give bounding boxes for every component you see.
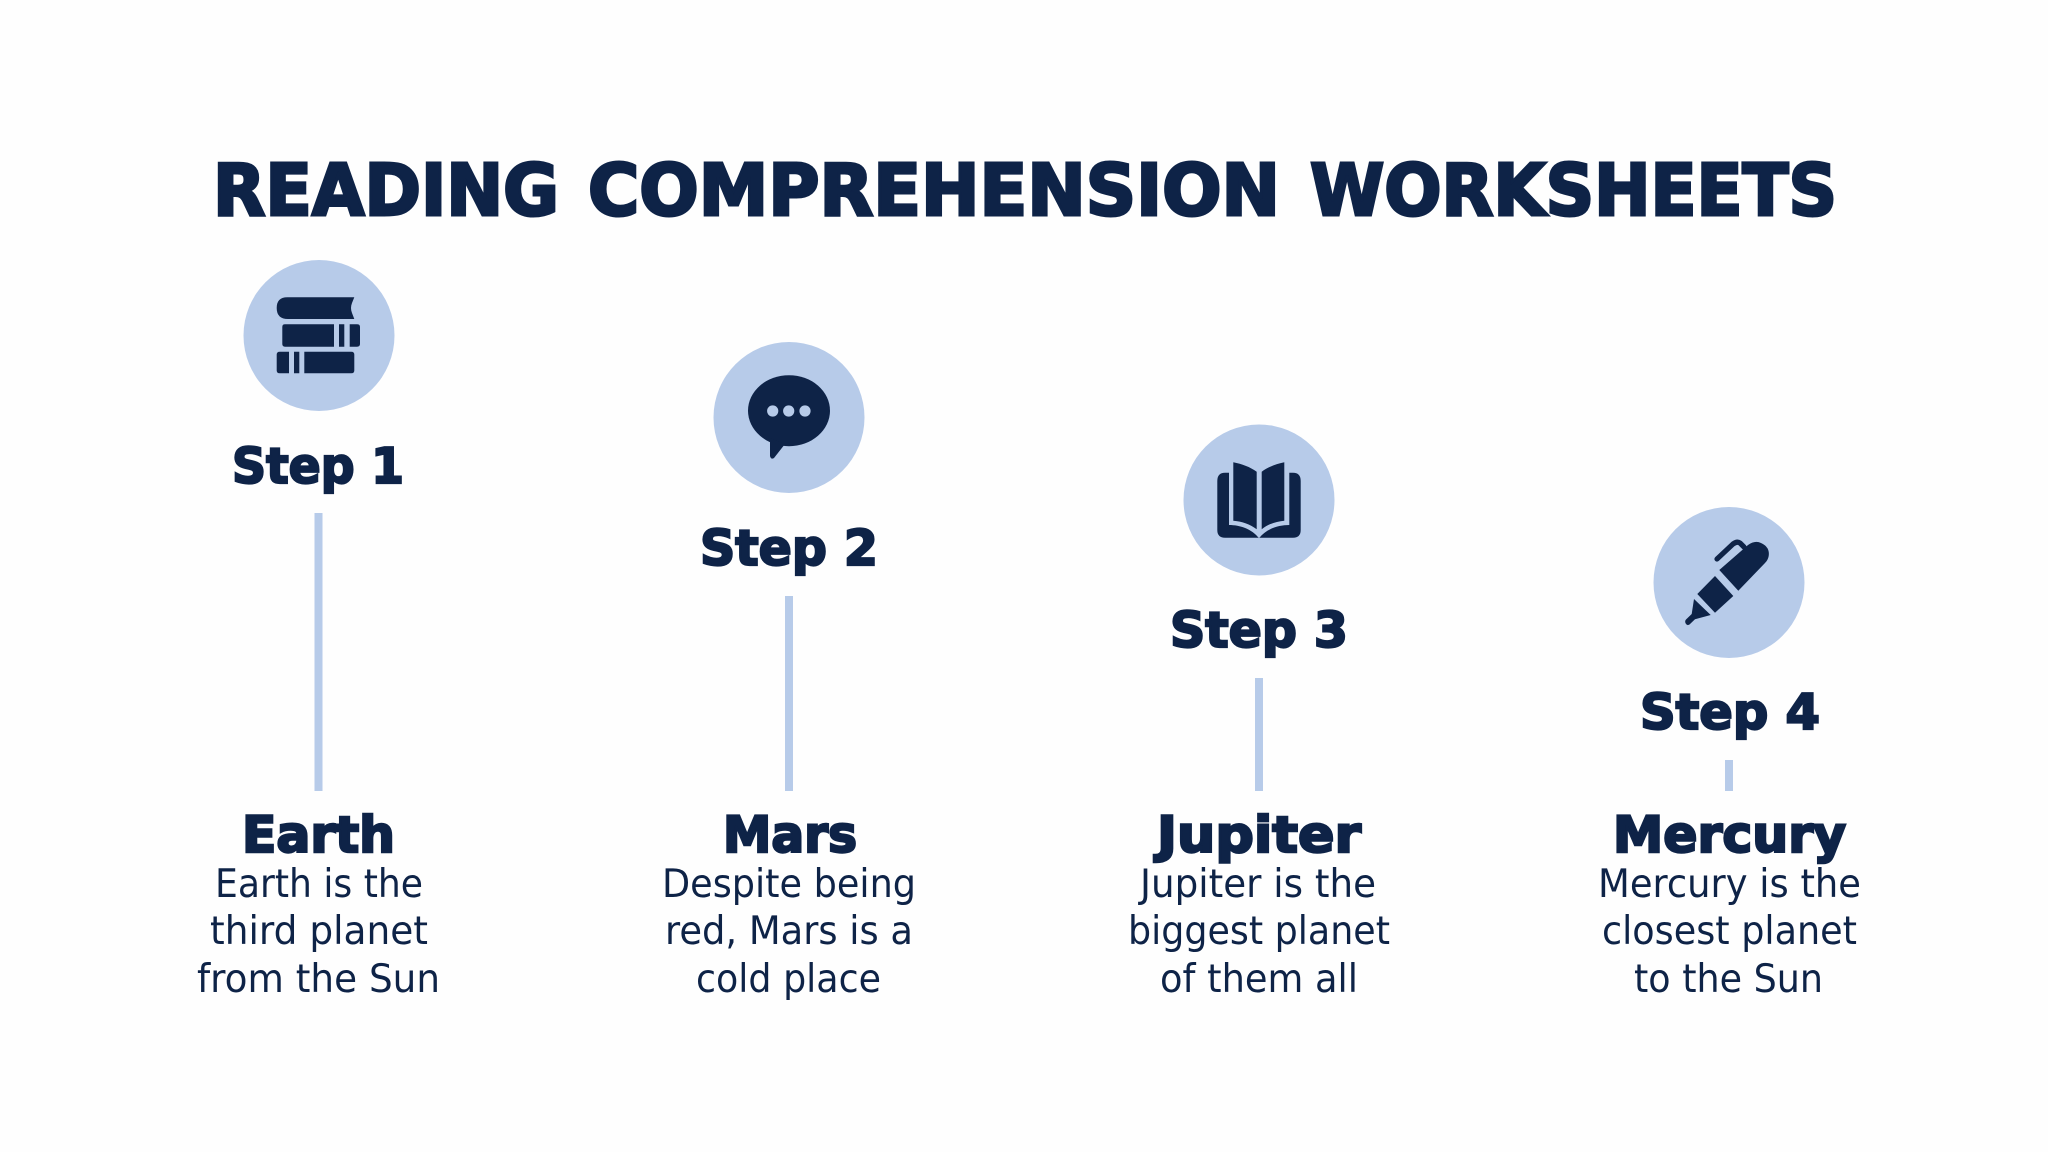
description: of them all (1160, 957, 1358, 1002)
icon: pen (1654, 507, 1804, 658)
planet name: Jupiter (1154, 806, 1361, 864)
description (662, 862, 916, 1002)
description: third planet (210, 909, 428, 954)
description (197, 862, 440, 1002)
panel: step 3 Jupiter (1128, 424, 1390, 1002)
connector line (785, 596, 793, 791)
step label: Step 4 (1640, 684, 1820, 741)
connector line (314, 513, 322, 791)
description: biggest planet (1128, 909, 1390, 954)
description: cold place (696, 957, 881, 1002)
title: COMPREHENSION (588, 149, 1280, 232)
panel: step 4 Mercury (1598, 507, 1861, 1002)
step label: Step 1 (232, 438, 404, 495)
title: WORKSHEETS (1310, 149, 1837, 232)
title (213, 149, 1837, 232)
description: to the Sun (1634, 957, 1823, 1002)
description: Jupiter is the (1137, 862, 1376, 907)
icon: open book (1184, 424, 1334, 576)
connector line (1255, 678, 1263, 791)
description: closest planet (1602, 909, 1857, 954)
connector line (1725, 760, 1733, 791)
description (1128, 862, 1390, 1002)
description (1598, 862, 1861, 1002)
step label: Step 3 (1170, 602, 1348, 659)
step label: Step 2 (700, 520, 878, 577)
description: red, Mars is a (665, 909, 913, 954)
planet name: Earth (242, 806, 395, 864)
title: READING (213, 149, 559, 232)
icon: stack of books (244, 260, 394, 411)
planet name: Mercury (1613, 806, 1846, 864)
panel: step 1 Earth (197, 260, 440, 1002)
icon: speech bubble (714, 342, 864, 493)
planet name: Mars (723, 806, 857, 864)
description: from the Sun (197, 957, 440, 1002)
description: Despite being (662, 862, 916, 907)
panel: step 2 Mars (662, 342, 916, 1002)
description: Earth is the (215, 862, 423, 907)
description: Mercury is the (1598, 862, 1861, 907)
